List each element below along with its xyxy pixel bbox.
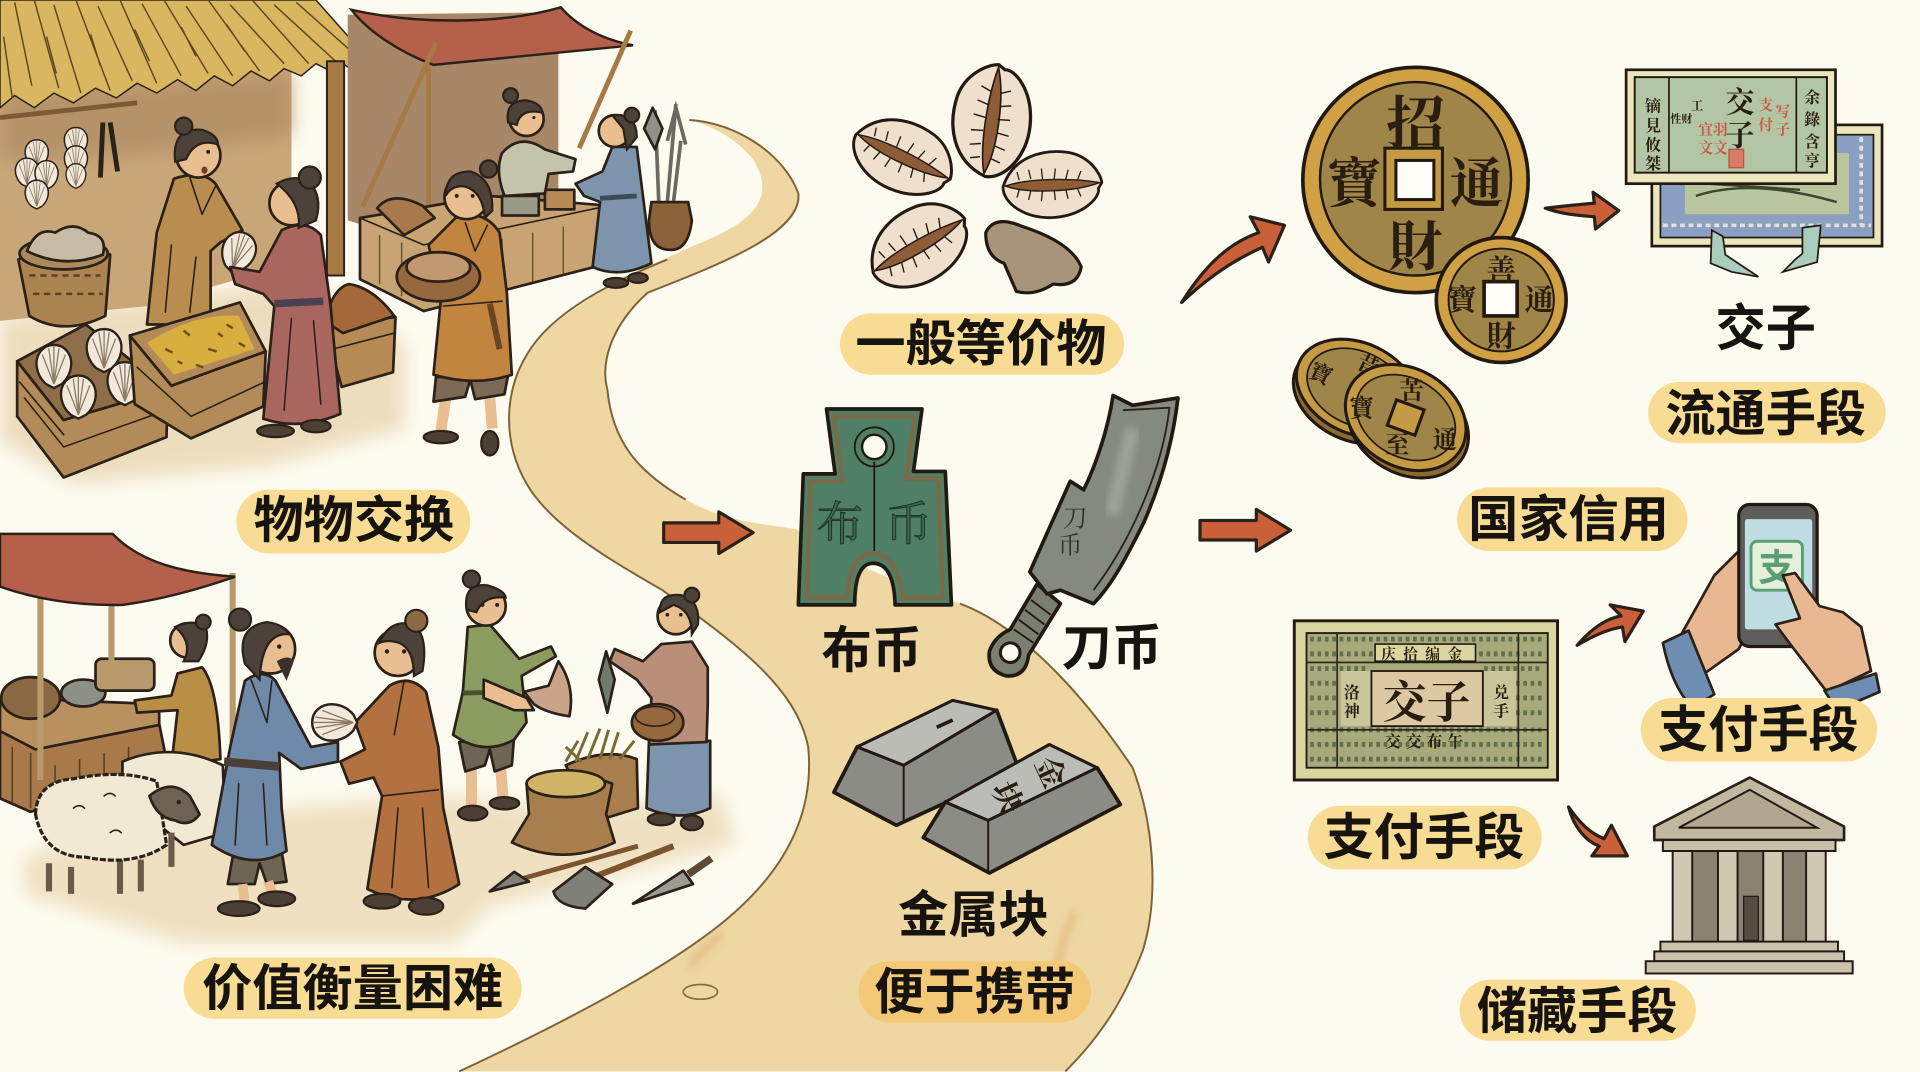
thatched roof <box>0 0 373 108</box>
banknote: green front note: 支 <box>1758 96 1773 114</box>
stall poles <box>362 31 631 208</box>
banknote: green front note <box>1626 70 1836 184</box>
large bronze coin: 招 <box>1386 92 1445 157</box>
shell exchanged <box>216 228 261 277</box>
banknote: green front note: 宜 <box>1698 122 1713 139</box>
phone payment with hands <box>1663 504 1880 710</box>
right hand <box>1776 573 1871 692</box>
arrow to jiaozi notes <box>1545 192 1619 229</box>
figure: maroon robe woman <box>230 167 340 437</box>
label: 价值衡量困难: 价值衡量困难 <box>202 960 503 1016</box>
red canopy <box>0 534 235 605</box>
large bronze coin: 通 <box>1450 154 1504 214</box>
label: 物物交换: 物物交换 <box>253 493 454 549</box>
arrow to spade coin <box>664 512 753 553</box>
phone payment with hands: 支 <box>1758 547 1795 588</box>
back coin <box>1277 320 1434 463</box>
spade coin: 币 <box>885 500 932 551</box>
left sleeve <box>1663 631 1714 708</box>
small bronze coin: 財 <box>1487 321 1517 354</box>
banknote: green front note: 交 <box>1725 87 1755 120</box>
banknote: green front note: 子 <box>1725 121 1755 153</box>
interior <box>1673 851 1824 943</box>
basket of shells <box>18 227 110 326</box>
label: 布币: 布币 <box>822 622 922 678</box>
label: 支付手段 right: 支付手段 <box>1658 702 1859 758</box>
banknote: ornate jiaozi: 神 <box>1344 702 1360 720</box>
cowrie top <box>944 58 1040 183</box>
label: 刀币: 刀币 <box>1062 620 1162 676</box>
figure: grey robe seller <box>499 88 576 196</box>
stall canopy <box>351 7 633 65</box>
label: 流通手段: 流通手段 <box>1665 386 1866 442</box>
label: 储藏手段: 储藏手段 <box>1477 984 1678 1040</box>
label: 交子: 交子 <box>1716 300 1816 356</box>
spade coin: 布 <box>817 500 863 551</box>
tools on ground <box>490 846 711 909</box>
banknote: green front note: 亨 <box>1804 152 1820 171</box>
hanging fish <box>599 651 615 713</box>
market table <box>0 659 168 812</box>
banknote: ornate jiaozi: 交子 <box>1382 679 1471 728</box>
banknote: green front note: 性财 <box>1670 111 1692 125</box>
banknote: green front note: 付 <box>1758 117 1773 134</box>
label: 国家信用: 国家信用 <box>1468 491 1669 547</box>
banknote: ornate jiaozi: 庆拾编金 <box>1381 645 1469 663</box>
knife coin: 币 <box>1058 531 1082 559</box>
banknote: ornate jiaozi: 交交布午 <box>1385 732 1468 751</box>
crate of grain <box>130 302 266 438</box>
banknote: green front note: 文 <box>1698 140 1713 157</box>
banknote: green front note: 写 <box>1776 103 1791 120</box>
banknote: green front note: 羽 <box>1713 122 1728 139</box>
wall shading <box>0 73 291 159</box>
stall back wall <box>348 12 558 227</box>
figure: blue robe customer <box>576 108 651 288</box>
figure: brown robe merchant <box>147 118 242 324</box>
brown stone shell <box>986 222 1081 293</box>
metal ingots <box>834 700 1120 873</box>
scene: difficult value measurement <box>0 534 735 943</box>
curved arrow to coin <box>1182 217 1284 302</box>
cowrie left <box>841 102 965 212</box>
sheep pair <box>36 752 225 894</box>
banknote: green front note: 見 <box>1645 117 1661 135</box>
figure: orange robe woman with bowl <box>397 160 512 456</box>
crate of shells <box>17 324 168 478</box>
label: 金属块: 金属块 <box>898 887 1049 943</box>
label: 便于携带: 便于携带 <box>874 964 1075 1020</box>
crate of roots back <box>324 284 396 387</box>
cowrie right <box>1003 152 1102 218</box>
banknote: blue border back note <box>1652 125 1882 246</box>
exchange hands teal arrows <box>1711 225 1821 277</box>
pediment <box>1654 778 1844 840</box>
large bronze coin: 財 <box>1389 218 1443 278</box>
banknote: green front note: 子 <box>1776 122 1791 139</box>
hanging fowl <box>524 661 571 716</box>
large bronze coin: 寶 <box>1327 154 1382 214</box>
door <box>1744 896 1758 940</box>
figure: yellow dress woman at stall <box>135 615 220 765</box>
banknote: ornate jiaozi <box>1294 621 1558 780</box>
ingot two <box>923 744 1120 873</box>
label: 一般等价物: 一般等价物 <box>855 316 1106 372</box>
grain sacks <box>512 729 638 855</box>
stacked coins <box>1277 320 1488 499</box>
ingot two: 块 <box>985 777 1029 819</box>
knife coin <box>989 396 1178 676</box>
left hand <box>1680 551 1745 680</box>
bank temple <box>1646 778 1853 973</box>
small bronze coin: 通 <box>1524 284 1554 317</box>
shell being traded <box>312 704 357 741</box>
vase with tools <box>644 104 692 250</box>
back coin: 寶 <box>1305 358 1337 390</box>
ground wash <box>24 796 735 943</box>
figure: woman with basket <box>610 588 710 830</box>
scene: barter market <box>0 0 692 484</box>
front coin <box>1326 343 1488 499</box>
spade coin <box>798 409 951 605</box>
small bronze coin: 寶 <box>1447 284 1477 317</box>
banknote: ornate jiaozi: 洛 <box>1344 683 1360 702</box>
cowrie shells group <box>841 58 1102 303</box>
knife coin: 刀 <box>1063 506 1087 533</box>
front coin: 至 <box>1385 431 1410 459</box>
ingot one <box>834 700 1019 825</box>
figure: blue robed man <box>212 609 338 916</box>
banknote: green front note: 錄 <box>1804 111 1820 129</box>
banknote: green front note: 攸 <box>1645 136 1661 155</box>
front coin: 通 <box>1433 426 1457 454</box>
arrow to phone <box>1577 605 1643 645</box>
banknote: green front note: 文 <box>1713 140 1728 157</box>
arrow to bank <box>1569 807 1627 856</box>
arrow to state coins <box>1200 509 1291 551</box>
figure: brown robed man <box>340 610 459 915</box>
columns <box>1673 851 1826 943</box>
right sleeve <box>1824 673 1880 710</box>
small bronze coin <box>1436 238 1566 362</box>
banknote: green front note: 工 <box>1691 99 1703 113</box>
large bronze coin <box>1303 67 1528 293</box>
steps <box>1646 942 1853 973</box>
banknote: green front note: 余 <box>1804 88 1821 107</box>
wall of hut <box>0 61 291 321</box>
winding road <box>459 120 1152 1071</box>
phone <box>1739 504 1817 647</box>
ground wash <box>0 282 404 484</box>
back coin: 昔 <box>1353 349 1383 381</box>
post <box>327 61 344 276</box>
cowrie bottom left <box>855 188 983 303</box>
banknote: ornate jiaozi: 手 <box>1493 702 1509 720</box>
entablature <box>1663 840 1836 851</box>
stall table <box>360 190 609 311</box>
small bronze coin: 善 <box>1487 254 1516 287</box>
tent poles <box>40 573 233 780</box>
hanging pole and goods <box>0 103 137 209</box>
figure: green shirt man <box>453 571 556 820</box>
front coin: 苦 <box>1400 377 1424 405</box>
banknote: green front note: 镝 <box>1645 97 1661 115</box>
banknote: green front note: 含 <box>1804 133 1820 151</box>
ingot two: 金 <box>1028 751 1072 794</box>
front coin: 寶 <box>1349 394 1374 422</box>
banknote: ornate jiaozi: 兑 <box>1493 683 1509 702</box>
banknote: green front note: 桀 <box>1645 154 1661 173</box>
label: 支付手段 left: 支付手段 <box>1324 810 1524 866</box>
